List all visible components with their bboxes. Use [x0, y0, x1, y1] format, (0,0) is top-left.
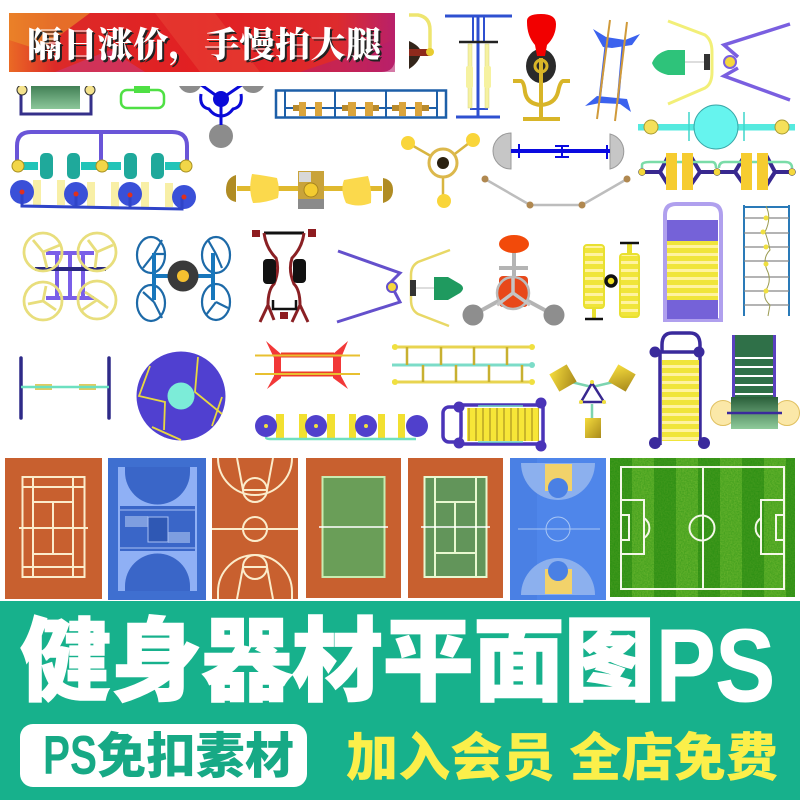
promo banner: [9, 13, 395, 72]
yellow membership text: 加入会员 全店免费: [346, 730, 778, 788]
equipment: green roller fragment: [17, 84, 95, 114]
equipment: gold three-arm wheel: [401, 133, 480, 208]
equipment: yellow and mint ladder: [392, 344, 535, 385]
equipment: gray bent bar with brown nodes: [482, 176, 630, 208]
equipment: yellow ladders with black hub: [584, 243, 639, 319]
equipment: yellow slat board horizontal: [443, 398, 546, 452]
equipment: blue rack with gold blocks: [276, 90, 446, 118]
badge: PS free cutout: 免扣素材: [97, 730, 294, 784]
equipment: blue frame with gold rails: [585, 20, 640, 121]
equipment: purple frame with teal seats and blue discs: [10, 132, 196, 209]
equipment: yellow and purple V machine: [652, 21, 790, 104]
equipment: blue four-wheel with dark hub: [137, 237, 230, 321]
equipment: purple V with yellow arm: [337, 250, 463, 326]
equipment: tall navy frame with yellow slats: [649, 333, 710, 449]
bottom green panel: [0, 601, 800, 800]
equipment: green bracket: [121, 86, 164, 108]
equipment: blue stand with pale rods: [445, 16, 512, 117]
equipment: navy H with cyan bar: [21, 358, 109, 418]
equipment: purple tall board with yellow slats: [665, 204, 721, 320]
white band under banner: [0, 72, 400, 86]
equipment: red seat with gold base: [513, 14, 570, 119]
court: orange and green tennis: [408, 458, 503, 598]
court: blue basketball: [108, 458, 206, 600]
court: bright blue basketball: [510, 458, 606, 600]
equipment: red and black frame: [252, 229, 316, 322]
equipment: green roller with yellow discs: [710, 335, 800, 429]
equipment: blue ladder with wavy line: [744, 205, 789, 316]
court: orange badminton: [5, 458, 102, 599]
equipment: purple discs with yellow blocks: [255, 414, 428, 439]
equipment: orange seat with gray weights: [462, 235, 564, 326]
equipment: red frame with yellow rails: [255, 341, 360, 389]
equipment: blue three-spoke with gray weights: [178, 69, 265, 148]
equipment: yellow arm with dark hub: [409, 15, 434, 69]
badge: PS free cutout: PS: [43, 724, 97, 786]
equipment: gray half discs with blue bar: [493, 133, 624, 169]
court: orange basketball: [212, 458, 298, 599]
equipment: cyan disc with bar: [638, 105, 795, 149]
main title: 健身器材平面图: [20, 612, 655, 713]
equipment: yellow triangle with three blocks: [549, 364, 636, 438]
banner text: 隔日涨价，手慢拍大腿: [27, 18, 383, 68]
equipment: gold barbell machine: [226, 171, 393, 209]
equipment: yellow pads with navy arms: [638, 153, 796, 190]
badge: PS free cutout: [20, 724, 307, 787]
court: orange and green volleyball: [306, 458, 401, 598]
court: soccer field: [610, 458, 795, 597]
main title: PS: [656, 608, 775, 723]
equipment: yellow four-wheel with purple H: [24, 233, 116, 320]
equipment: purple disc with cyan centre: [136, 352, 226, 440]
